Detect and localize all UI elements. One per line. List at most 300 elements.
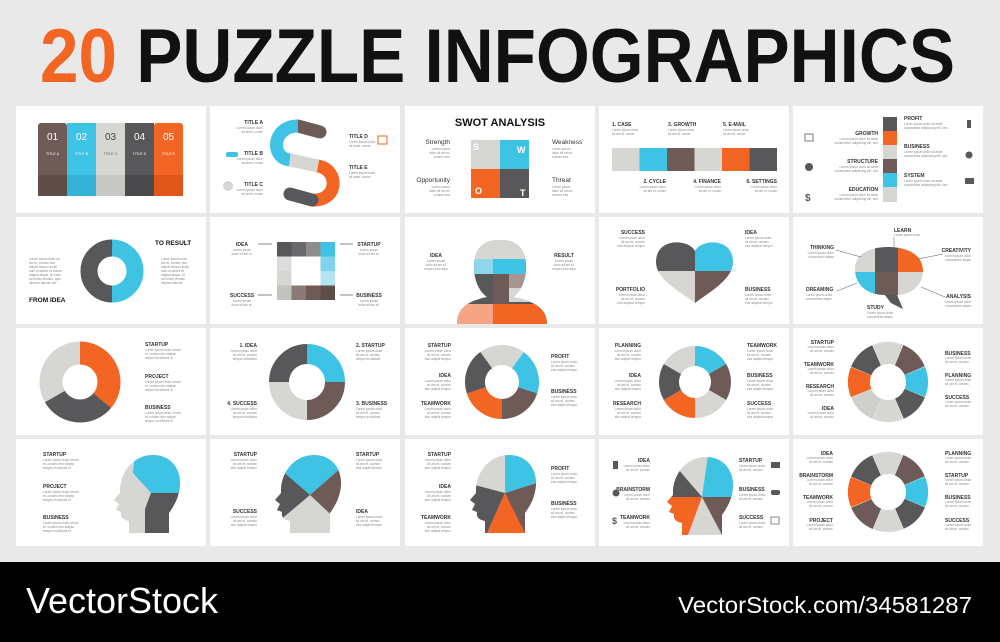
- card r1c5: vertical column: consectetur adipiscing elit, sed: [904, 126, 948, 130]
- card r1c1: numbered tiles: 04: [134, 132, 145, 143]
- card r2c4: heart: sit am et, consec: [621, 240, 645, 244]
- card r4c3: head five pieces: PROFIT: [551, 466, 569, 472]
- card r3c2: four-piece ring: tempor incididunt: [356, 415, 380, 419]
- card r2c5: brain: Lorem ipsum dolor: [945, 300, 972, 304]
- card r1c5: vertical column: Lorem ipsum dolor sit amet: [904, 179, 943, 183]
- card r4c1: head three pieces: STARTUP: [43, 452, 67, 458]
- card r3c5: eight-piece ring: PLANNING: [945, 373, 971, 379]
- card r4c4: head six pieces: Lorem ipsum dolor: [624, 493, 651, 497]
- card r3c5: eight-piece ring: sit am et, consec: [810, 349, 834, 353]
- card r4c4: head six pieces: Lorem ipsum dolor: [624, 521, 651, 525]
- card r1c5: vertical column: Lorem ipsum dolor sit amet: [840, 137, 878, 141]
- card r3c2: four-piece ring: sit am et, consec: [356, 353, 380, 357]
- card r2c2: square ring: STARTUP: [357, 242, 381, 248]
- card r4c2: head four pieces: sit am et, consec: [233, 462, 257, 466]
- card r3c1: three-piece ring: tempor incididunt ut: [145, 356, 173, 360]
- card r3c5: eight-piece ring: Lorem ipsum dolor: [808, 389, 835, 393]
- card r1c1: numbered tiles: TITLE E: [162, 152, 176, 156]
- card r3c4: six-piece ring: RESEARCH: [613, 401, 641, 407]
- card r3c5: eight-piece ring: BUSINESS: [945, 351, 971, 357]
- card r2c1: two-piece ring: ad minim veniam, quis: [29, 277, 61, 281]
- card r3c2: four-piece ring: 2. STARTUP: [356, 343, 385, 349]
- card r1c1: numbered tiles: TITLE B: [75, 152, 89, 156]
- card r1c2: dollar puzzle: TITLE B: [244, 151, 263, 157]
- card r1c4: horizontal strip: 2. CYCLE: [643, 179, 667, 185]
- card r3c2: four-piece ring: tempor incididunt: [233, 357, 257, 361]
- card r2c5: brain: [793, 217, 983, 324]
- card r1c5: vertical column: consectetur adipiscing elit, sed: [835, 197, 878, 201]
- card r4c3: head five pieces: etur adipisi tempor: [425, 466, 452, 470]
- card r3c4: six-piece ring: sit am et, consec: [747, 411, 771, 415]
- card r3c3: five-piece ring: etur adipisi tempor: [551, 403, 578, 407]
- card r4c5: eight-piece ring: TEAMWORK: [803, 495, 833, 501]
- card r3c3: five-piece ring: sit am et, consec: [427, 383, 451, 387]
- card r2c5: brain: LEARN: [894, 228, 912, 234]
- card r4c2: head four pieces: etur adipisi tempor: [356, 466, 383, 470]
- card r4c5: eight-piece ring: sit am et, consec: [945, 482, 969, 486]
- card r3c4: six-piece ring: BUSINESS: [747, 373, 773, 379]
- card r2c5: brain: consectetur adipis: [945, 258, 971, 262]
- card r3c1: three-piece ring: Lorem ipsum dolor sit am: [145, 411, 181, 415]
- card r4c3: head five pieces: sit am et, consec: [427, 494, 451, 498]
- card r3c2: four-piece ring: sit am et, consec: [356, 411, 380, 415]
- card r3c5: eight-piece ring: STARTUP: [811, 340, 835, 346]
- card r4c5: eight-piece ring: sit am et, consec: [945, 504, 969, 508]
- card r4c4: head six pieces: TEAMWORK: [620, 515, 650, 521]
- card r4c1: head three pieces: et, consec etur adipisi: [43, 462, 74, 466]
- card r2c3: head and shoulders: dolor sit am et,: [554, 263, 575, 267]
- card r1c2: dollar puzzle: TITLE C: [244, 182, 263, 188]
- card r1c2: dollar puzzle: sit amet, conse: [349, 175, 371, 179]
- card r3c1: three-piece ring: STARTUP: [145, 342, 169, 348]
- card r2c2: square ring: BUSINESS: [356, 293, 382, 299]
- card r3c5: eight-piece ring: Lorem ipsum dolor: [945, 356, 972, 360]
- card r4c2: head four pieces: STARTUP: [234, 452, 258, 458]
- card r4c1: head three pieces: tempor incididunt ut: [43, 498, 71, 502]
- card r1c1: numbered tiles: TITLE A: [46, 152, 60, 156]
- card r4c1: head three pieces: BUSINESS: [43, 515, 69, 521]
- card r1c5: vertical column: consectetur adipiscing elit, sed: [835, 169, 878, 173]
- card r4c1: head three pieces: et, consec etur adipisi: [43, 494, 74, 498]
- card r4c5: eight-piece ring: BRAINSTORM: [799, 473, 833, 479]
- card r3c4: six-piece ring: etur adipisi tempor: [747, 415, 774, 419]
- card r3c4: six-piece ring: etur adipisi tempor: [615, 387, 642, 391]
- card r4c2: head four pieces: [210, 439, 400, 546]
- card r4c5: eight-piece ring: PLANNING: [945, 451, 971, 457]
- card r1c3: SWOT: Weakness: [552, 139, 583, 146]
- card r2c2: square ring: Lorem ipsum: [233, 299, 252, 303]
- card r1c4: horizontal strip: sit am et, conse: [699, 189, 721, 193]
- card r3c3: five-piece ring: Lorem ipsum dolor: [551, 395, 578, 399]
- card r3c4: six-piece ring: sit am et, consec: [747, 383, 771, 387]
- card r1c3: SWOT: S: [473, 142, 479, 152]
- card r2c2: square ring: dolor sit am et,: [232, 252, 253, 256]
- card r1c3: SWOT: consec etur: [552, 155, 569, 159]
- card r1c3: SWOT: Lorem ipsum: [552, 147, 571, 151]
- card r4c5: eight-piece ring: BUSINESS: [945, 495, 971, 501]
- card r1c2: dollar puzzle: Lorem ipsum dolor: [237, 126, 264, 130]
- card r2c5: brain: Lorem ipsum dolor: [894, 233, 921, 237]
- card r4c3: head five pieces: sit am et, consec: [551, 476, 575, 480]
- card r3c3: five-piece ring: IDEA: [439, 373, 451, 379]
- card r3c3: five-piece ring: Lorem ipsum dolor: [425, 379, 452, 383]
- card r2c4: heart: sit am et, consec: [621, 297, 645, 301]
- card r2c5: brain: Lorem ipsum dolor: [945, 254, 972, 258]
- card r1c4: horizontal strip: 5. E-MAIL: [723, 122, 746, 128]
- card r2c5: brain: ANALYSIS: [946, 294, 972, 300]
- card r1c3: SWOT: Opportunity: [416, 177, 451, 184]
- card r3c3: five-piece ring: BUSINESS: [551, 389, 577, 395]
- card r3c3: five-piece ring: PROFIT: [551, 354, 569, 360]
- card r4c4: head six pieces: Lorem ipsum dolor: [739, 493, 766, 497]
- card r3c5: eight-piece ring: sit am et, consec: [810, 393, 834, 397]
- card r3c4: six-piece ring: Lorem ipsum dolor: [615, 407, 642, 411]
- card r1c4: horizontal strip: sit am et, conse: [755, 189, 777, 193]
- card r1c4: horizontal strip: Lorem ipsum dolor: [695, 185, 722, 189]
- card r4c2: head four pieces: sit am et, consec: [356, 519, 380, 523]
- card r4c2: head four pieces: IDEA: [356, 509, 368, 515]
- footer brand: VectorStock: [26, 580, 219, 621]
- card r4c5: eight-piece ring: SUCCESS: [945, 518, 970, 524]
- card r2c4: heart: BUSINESS: [745, 287, 771, 293]
- card r3c2: four-piece ring: tempor incididunt: [233, 415, 257, 419]
- card r2c3: head and shoulders: Lorem ipsum: [555, 259, 574, 263]
- footer url: VectorStock.com/34581287: [678, 592, 972, 618]
- card r3c4: six-piece ring: SUCCESS: [747, 401, 772, 407]
- card r1c5: vertical column: consectetur adipiscing elit, sed: [835, 141, 878, 145]
- card r4c5: eight-piece ring: Lorem ipsum dolor: [945, 523, 972, 527]
- card r3c2: four-piece ring: tempor incididunt: [356, 357, 380, 361]
- card r1c3: SWOT: Lorem ipsum: [432, 185, 450, 189]
- card r3c1: three-piece ring: et, consec etur adipisi: [145, 384, 176, 388]
- card r3c2: four-piece ring: Lorem ipsum dolor: [231, 349, 258, 353]
- card r2c4: heart: [599, 217, 789, 324]
- card r1c5: vertical column: STRUCTURE: [847, 159, 879, 165]
- card r3c5: eight-piece ring: TEAMWORK: [804, 362, 834, 368]
- card r4c5: eight-piece ring: sit am et, consec: [945, 460, 969, 464]
- card r4c3: head five pieces: etur adipisi tempor: [425, 498, 452, 502]
- card r2c3: head and shoulders: dolor sit am et,: [426, 263, 447, 267]
- card r4c2: head four pieces: Lorem ipsum dolor: [356, 458, 383, 462]
- card r4c2: head four pieces: SUCCESS: [233, 509, 258, 515]
- card r3c3: five-piece ring: sit am et, consec: [551, 364, 575, 368]
- card r2c1: two-piece ring: FROM IDEA: [29, 297, 66, 304]
- card r1c5: vertical column: consectetur adipiscing elit, sed: [904, 183, 948, 187]
- card r3c4: six-piece ring: IDEA: [629, 373, 641, 379]
- card r1c4: horizontal strip: sit am et, conse: [644, 189, 666, 193]
- card r1c4: horizontal strip: [599, 106, 789, 213]
- card r4c3: head five pieces: Lorem ipsum dolor: [551, 472, 578, 476]
- card r1c5: vertical column: SYSTEM: [904, 173, 925, 179]
- card r3c1: three-piece ring: et, consec etur adipisi: [145, 415, 176, 419]
- card r4c1: head three pieces: Lorem ipsum dolor sit am: [43, 521, 79, 525]
- card r4c2: head four pieces: Lorem ipsum dolor: [356, 515, 383, 519]
- card r3c4: six-piece ring: sit am et, consec: [747, 353, 771, 357]
- card r2c5: brain: consectetur adipis: [945, 304, 971, 308]
- card r4c5: eight-piece ring: Lorem ipsum dolor: [945, 500, 972, 504]
- card r1c3: SWOT: dolor sit am et,: [429, 189, 450, 193]
- card r1c4: horizontal strip: Lorem ipsum dolor: [612, 128, 639, 132]
- card r4c4: head six pieces: BRAINSTORM: [616, 487, 650, 493]
- card r3c4: six-piece ring: etur adipisi tempor: [615, 415, 642, 419]
- card r1c4: horizontal strip: Lorem ipsum dolor: [723, 128, 750, 132]
- card r4c2: head four pieces: sit am et, consec: [356, 462, 380, 466]
- card r3c5: eight-piece ring: sit am et, consec: [810, 415, 834, 419]
- card r3c5: eight-piece ring: SUCCESS: [945, 395, 970, 401]
- card r1c2: dollar puzzle: Lorem ipsum dolor: [349, 171, 376, 175]
- card r3c3: five-piece ring: sit am et, consec: [427, 411, 451, 415]
- card r4c4: head six pieces: sit am et, consec: [739, 525, 763, 529]
- card r2c5: brain: Lorem ipsum dolor: [808, 251, 835, 255]
- card r1c3: SWOT: dolor sit am et,: [552, 151, 573, 155]
- card r4c1: head three pieces: [16, 439, 206, 546]
- card r4c5: eight-piece ring: Lorem ipsum dolor: [807, 500, 834, 504]
- card r3c3: five-piece ring: STARTUP: [428, 343, 452, 349]
- card r2c3: head and shoulders: RESULT: [554, 253, 574, 259]
- card r3c4: six-piece ring: Lorem ipsum dolor: [747, 407, 774, 411]
- card r4c2: head four pieces: etur adipisi tempor: [231, 523, 258, 527]
- card r4c4: head six pieces: sit am et, consec: [626, 468, 650, 472]
- card r3c3: five-piece ring: Lorem ipsum dolor: [551, 360, 578, 364]
- card r1c3: SWOT: dolor sit am et,: [429, 151, 450, 155]
- card r3c1: three-piece ring: Lorem ipsum dolor sit am: [145, 348, 181, 352]
- card r1c2: dollar puzzle: sit amet, conse: [242, 130, 263, 134]
- card r1c3: SWOT: consec etur: [552, 193, 569, 197]
- card r2c1: two-piece ring: am et, consec etur: [161, 261, 188, 265]
- card r1c2: dollar puzzle: Lorem ipsum dolor: [237, 188, 264, 192]
- card r3c2: four-piece ring: 3. BUSINESS: [356, 401, 388, 407]
- card r3c2: four-piece ring: Lorem ipsum dolor: [356, 349, 383, 353]
- card r2c5: brain: Lorem ipsum dolor: [867, 311, 894, 315]
- card r2c2: square ring: SUCCESS: [230, 293, 255, 299]
- card r1c5: vertical column: Lorem ipsum dolor sit amet: [904, 122, 943, 126]
- card r2c5: brain: consectetur adipis: [806, 297, 832, 301]
- card r4c3: head five pieces: sit am et, consec: [427, 462, 451, 466]
- card r2c2: square ring: dolor sit am et,: [359, 252, 380, 256]
- card r1c5: vertical column: [793, 106, 983, 213]
- card r4c1: head three pieces: Lorem ipsum dolor sit am: [43, 490, 79, 494]
- card r3c4: six-piece ring: etur adipisi tempor: [615, 357, 642, 361]
- card r4c3: head five pieces: etur adipisi tempor: [551, 515, 578, 519]
- card r4c4: head six pieces: SUCCESS: [739, 515, 764, 521]
- card r2c4: heart: PORTFOLIO: [616, 287, 645, 293]
- card r2c1: two-piece ring: magna aliqua. Ut: [161, 273, 185, 277]
- card r2c3: head and shoulders: consec etur adip: [552, 267, 576, 271]
- card r4c5: eight-piece ring: PROJECT: [809, 518, 833, 524]
- card r2c1: two-piece ring: ullamco laboris: [161, 281, 183, 285]
- card r1c3: SWOT: T: [520, 188, 526, 198]
- card r1c4: horizontal strip: sit am et, conse: [668, 132, 691, 136]
- card r3c5: eight-piece ring: [793, 328, 983, 435]
- card r2c2: square ring: Lorem ipsum: [233, 248, 252, 252]
- card r4c3: head five pieces: sit am et, consec: [551, 511, 575, 515]
- card r1c4: horizontal strip: sit am et, conse: [612, 132, 635, 136]
- card r2c1: two-piece ring: ad minim veniam: [161, 277, 185, 281]
- card r3c3: five-piece ring: TEAMWORK: [421, 401, 451, 407]
- card r2c4: heart: Lorem ipsum dolor: [619, 293, 646, 297]
- card r3c5: eight-piece ring: IDEA: [822, 406, 834, 412]
- card r3c5: eight-piece ring: Lorem ipsum dolor: [945, 400, 972, 404]
- card r3c5: eight-piece ring: Lorem ipsum dolor: [808, 345, 835, 349]
- card r2c2: square ring: IDEA: [236, 242, 248, 248]
- card r4c4: head six pieces: Lorem ipsum dolor: [624, 464, 651, 468]
- card r1c3: SWOT: consec etur: [434, 155, 451, 159]
- card r1c4: horizontal strip: 6. SETTINGS: [746, 179, 778, 185]
- card r3c3: five-piece ring: sit am et, consec: [427, 353, 451, 357]
- card r4c3: head five pieces: Lorem ipsum dolor: [425, 490, 452, 494]
- card r2c4: heart: sit am et, consec: [745, 240, 769, 244]
- card r3c5: eight-piece ring: Lorem ipsum dolor: [808, 367, 835, 371]
- card r4c5: eight-piece ring: Lorem ipsum dolor: [945, 456, 972, 460]
- card r2c5: brain: consectetur adipis: [867, 315, 893, 319]
- card r3c5: eight-piece ring: sit am et, consec: [810, 371, 834, 375]
- card r4c2: head four pieces: Lorem ipsum dolor: [231, 515, 258, 519]
- card r4c3: head five pieces: IDEA: [439, 484, 451, 490]
- card r2c4: heart: etur adipisci tempor: [617, 244, 646, 248]
- card r1c1: numbered tiles: 01: [47, 132, 58, 143]
- card r1c2: dollar puzzle: Lorem ipsum dolor: [349, 140, 376, 144]
- card r4c3: head five pieces: etur adipisi tempor: [551, 480, 578, 484]
- card r1c3: SWOT: Lorem ipsum: [432, 147, 450, 151]
- card r2c1: two-piece ring: dunt ut labore et dolore: [29, 269, 62, 273]
- card r4c5: eight-piece ring: Lorem ipsum dolor: [807, 478, 834, 482]
- card r1c4: horizontal strip: Lorem ipsum dolor: [640, 185, 667, 189]
- card r2c2: square ring: dolor sit am et,: [359, 303, 380, 307]
- card r2c3: head and shoulders: consec etur adip: [424, 267, 448, 271]
- card r3c2: four-piece ring: 1. IDEA: [239, 343, 257, 349]
- card r1c2: dollar puzzle: Lorem ipsum dolor: [237, 157, 264, 161]
- card r4c2: head four pieces: etur adipisi tempor: [231, 466, 258, 470]
- card r4c1: head three pieces: tempor incididunt ut: [43, 529, 71, 533]
- card r1c4: horizontal strip: 4. FINANCE: [693, 179, 722, 185]
- card r1c5: vertical column: Lorem ipsum dolor sit amet: [840, 193, 878, 197]
- card r3c2: four-piece ring: Lorem ipsum dolor: [356, 407, 383, 411]
- card r2c2: square ring: Lorem ipsum: [360, 248, 379, 252]
- card r1c3: SWOT: O: [475, 186, 482, 196]
- card r4c1: head three pieces: Lorem ipsum dolor sit am: [43, 458, 79, 462]
- card r3c1: three-piece ring: BUSINESS: [145, 405, 171, 411]
- card r4c4: head six pieces: BUSINESS: [739, 487, 765, 493]
- card r4c5: eight-piece ring: sit am et, consec: [945, 527, 969, 531]
- card r3c4: six-piece ring: etur adipisi tempor: [747, 387, 774, 391]
- card r1c3: SWOT: W: [517, 145, 526, 155]
- card r2c5: brain: CREATIVITY: [942, 248, 972, 254]
- card r1c1: numbered tiles: TITLE D: [133, 152, 147, 156]
- card r1c3: SWOT: consec etur: [434, 193, 451, 197]
- card r4c5: eight-piece ring: IDEA: [821, 451, 833, 457]
- card r1c2: dollar puzzle: TITLE D: [349, 134, 368, 140]
- card r3c4: six-piece ring: Lorem ipsum dolor: [615, 349, 642, 353]
- card r2c4: heart: SUCCESS: [621, 230, 646, 236]
- card r1c3: SWOT: Lorem ipsum: [552, 185, 571, 189]
- card r1c5: vertical column: PROFIT: [904, 116, 922, 122]
- card r1c5: vertical column: $: [805, 193, 811, 204]
- card r3c4: six-piece ring: TEAMWORK: [747, 343, 777, 349]
- card r4c3: head five pieces: STARTUP: [428, 452, 452, 458]
- card r3c1: three-piece ring: tempor incididunt ut: [145, 388, 173, 392]
- card r2c2: square ring: [210, 217, 400, 324]
- card r2c5: brain: consectetur adipis: [808, 255, 834, 259]
- card r3c3: five-piece ring: etur adipisi tempor: [551, 368, 578, 372]
- card r1c1: numbered tiles: 05: [163, 132, 174, 143]
- card r2c3: head and shoulders: IDEA: [430, 253, 442, 259]
- card r2c4: heart: Lorem ipsum dolor: [619, 236, 646, 240]
- card r2c1: two-piece ring: [16, 217, 206, 324]
- card r1c3: SWOT: Strength: [425, 139, 450, 146]
- card r2c3: head and shoulders: Lorem ipsum: [427, 259, 446, 263]
- card r4c4: head six pieces: Lorem ipsum dolor: [739, 521, 766, 525]
- card r2c2: square ring: dolor sit am et,: [232, 303, 253, 307]
- card r4c1: head three pieces: tempor incididunt ut: [43, 466, 71, 470]
- card r3c1: three-piece ring: Lorem ipsum dolor sit am: [145, 380, 181, 384]
- card r3c5: eight-piece ring: RESEARCH: [806, 384, 834, 390]
- card r1c2: dollar puzzle: [210, 106, 400, 213]
- card r3c1: three-piece ring: PROJECT: [145, 374, 169, 380]
- card r4c5: eight-piece ring: Lorem ipsum dolor: [945, 478, 972, 482]
- card r2c1: two-piece ring: ullamco laboris nisi: [29, 281, 56, 285]
- card r3c5: eight-piece ring: Lorem ipsum dolor: [808, 411, 835, 415]
- card r1c1: numbered tiles: 03: [105, 132, 116, 143]
- card r4c5: eight-piece ring: Lorem ipsum dolor: [807, 523, 834, 527]
- card r4c1: head three pieces: et, consec etur adipisi: [43, 525, 74, 529]
- card r1c2: dollar puzzle: TITLE E: [349, 165, 368, 171]
- card r4c4: head six pieces: STARTUP: [739, 458, 763, 464]
- card r4c3: head five pieces: sit am et, consec: [427, 525, 451, 529]
- card r2c4: heart: etur adipisci tempor: [617, 301, 646, 305]
- card r2c1: two-piece ring: am et, consec etur: [29, 261, 56, 265]
- card r3c1: three-piece ring: tempor incididunt ut: [145, 419, 173, 423]
- card r4c4: head six pieces: sit am et, consec: [739, 468, 763, 472]
- card r4c3: head five pieces: Lorem ipsum dolor: [551, 507, 578, 511]
- card r4c1: head three pieces: PROJECT: [43, 484, 67, 490]
- card r1c5: vertical column: Lorem ipsum dolor sit amet: [840, 165, 878, 169]
- card r1c5: vertical column: Lorem ipsum dolor sit amet: [904, 150, 943, 154]
- card r4c4: head six pieces: IDEA: [638, 458, 650, 464]
- card r3c4: six-piece ring: sit am et, consec: [617, 353, 641, 357]
- card r1c5: vertical column: BUSINESS: [904, 144, 930, 150]
- card r1c4: horizontal strip: Lorem ipsum dolor: [751, 185, 778, 189]
- card r4c5: eight-piece ring: STARTUP: [945, 473, 969, 479]
- card r4c4: head six pieces: sit am et, consec: [626, 525, 650, 529]
- card r1c5: vertical column: EDUCATION: [849, 187, 878, 193]
- card r2c1: two-piece ring: Lorem ipsum dolor sit: [29, 257, 60, 261]
- card r3c2: four-piece ring: sit am et, consec: [233, 353, 257, 357]
- card r3c4: six-piece ring: Lorem ipsum dolor: [747, 349, 774, 353]
- card r2c4: heart: etur adipisci tempor: [745, 301, 774, 305]
- card r3c1: three-piece ring: et, consec etur adipisi: [145, 352, 176, 356]
- card r4c4: head six pieces: sit am et, consec: [626, 497, 650, 501]
- card r1c1: numbered tiles: TITLE C: [104, 152, 118, 156]
- card r1c5: vertical column: consectetur adipiscing elit, sed: [904, 154, 948, 158]
- card r4c3: head five pieces: BUSINESS: [551, 501, 577, 507]
- card r1c2: dollar puzzle: sit amet, conse: [349, 144, 371, 148]
- card r1c4: horizontal strip: 3. GROWTH: [668, 122, 697, 128]
- card r3c3: five-piece ring: [405, 328, 595, 435]
- card r3c3: five-piece ring: sit am et, consec: [551, 399, 575, 403]
- card r1c1: numbered tiles: 02: [76, 132, 87, 143]
- card r2c4: heart: etur adipisci tempor: [745, 244, 774, 248]
- card r4c5: eight-piece ring: Lorem ipsum dolor: [807, 456, 834, 460]
- card r4c4: head six pieces: [599, 439, 789, 546]
- card r1c2: dollar puzzle: sit amet, conse: [242, 161, 263, 165]
- card r3c5: eight-piece ring: sit am et, consec: [945, 360, 969, 364]
- card r3c3: five-piece ring: etur adipisi tempor: [425, 387, 452, 391]
- card r2c5: brain: STUDY: [867, 305, 885, 311]
- card r2c1: two-piece ring: dunt ut labore et: [161, 269, 184, 273]
- card r1c5: vertical column: GROWTH: [855, 131, 878, 137]
- card r3c4: six-piece ring: Lorem ipsum dolor: [747, 379, 774, 383]
- card r4c2: head four pieces: Lorem ipsum dolor: [231, 458, 258, 462]
